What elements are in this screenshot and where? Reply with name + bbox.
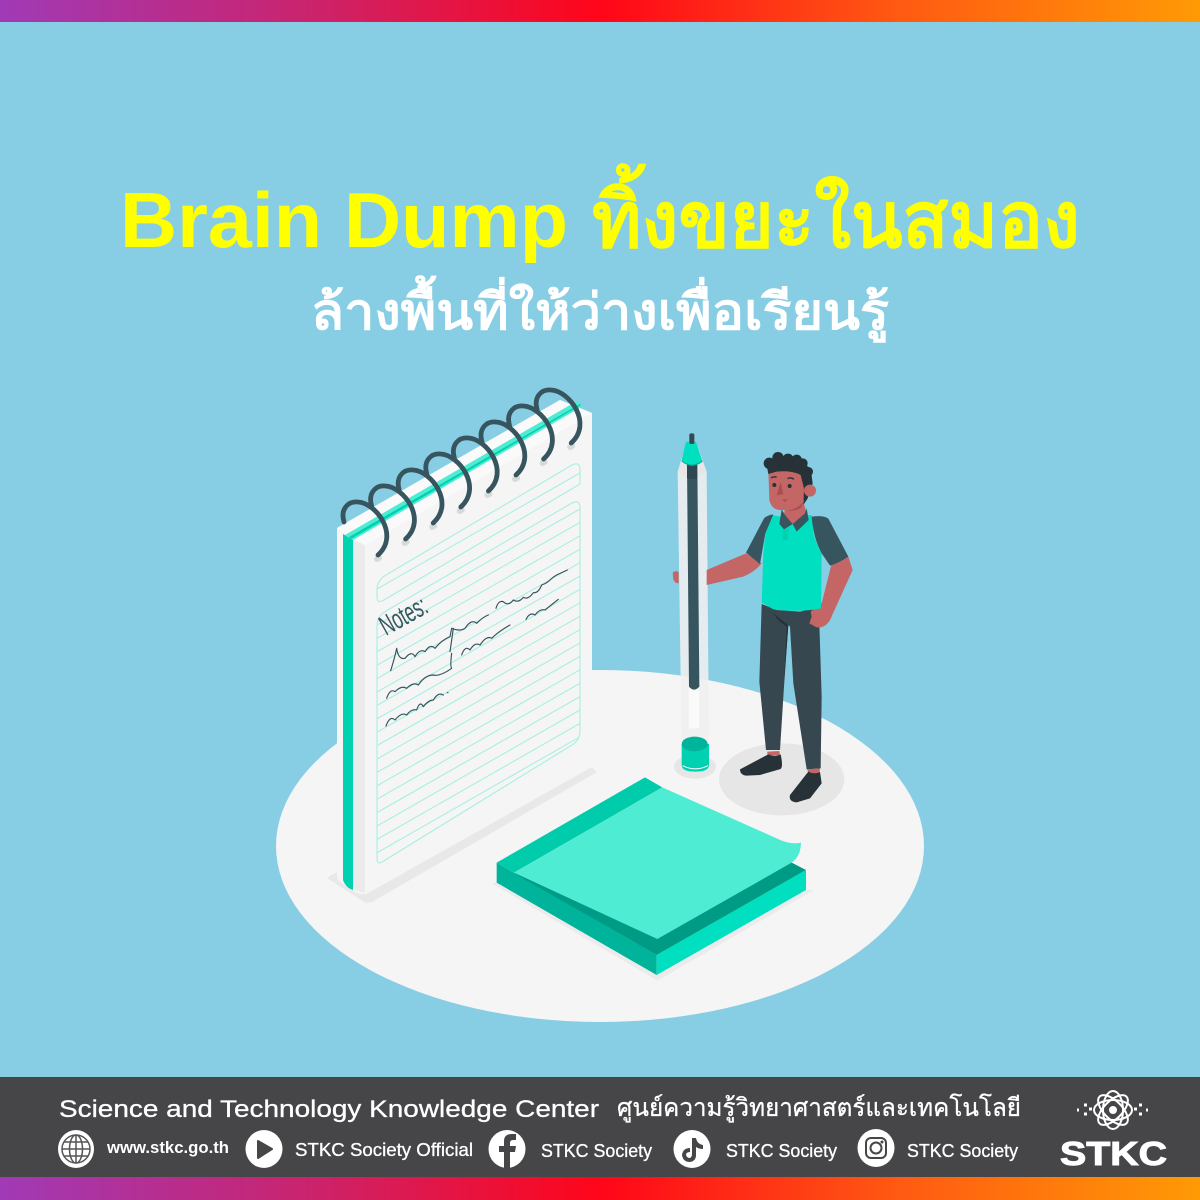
shirt placket [783, 528, 788, 541]
pencil nib [689, 433, 694, 444]
ring shadows [377, 446, 572, 559]
pencil cone [678, 442, 707, 477]
pencil barrel highlight [689, 688, 699, 728]
facebook label: STKC Society [541, 1141, 652, 1161]
icon: facebook [488, 1130, 526, 1168]
ruled box: lines [377, 502, 580, 863]
notebook top face [337, 400, 592, 545]
title: Brain Dump [120, 176, 568, 264]
right sleeve [812, 516, 848, 566]
illustration: man [673, 452, 853, 815]
icon: play [246, 1130, 282, 1168]
youtube label: STKC Society Official [295, 1140, 473, 1160]
footer band [0, 1077, 1200, 1177]
pencil bottom cap [682, 744, 709, 772]
neck [784, 500, 807, 525]
title [120, 163, 1080, 264]
pad top sheet with curl [514, 787, 801, 939]
pad binding strip [497, 777, 662, 873]
pencil tip [682, 442, 702, 465]
handwriting: scribbles [386, 570, 567, 726]
hair [764, 452, 813, 505]
pad left side [497, 863, 657, 975]
left arm [707, 553, 762, 585]
illustration: pencil [674, 433, 716, 779]
notebook green cover edge [343, 534, 353, 890]
illustration: floor disc [276, 670, 924, 1022]
trousers fold [773, 613, 788, 683]
ear [804, 485, 816, 497]
brows [771, 477, 794, 479]
nose [777, 482, 783, 495]
icon: instagram [858, 1129, 894, 1167]
left sleeve [746, 514, 773, 564]
pad right side [657, 870, 806, 975]
pencil ink shade [687, 465, 697, 479]
vest [762, 515, 822, 611]
hand on pencil [673, 571, 679, 583]
logo: STKC atom mark [1077, 1090, 1148, 1130]
footer title: english: Science and Technology Knowledge Center [59, 1096, 599, 1123]
spiral rings [343, 390, 580, 559]
icon: tiktok [674, 1130, 710, 1168]
right arm [809, 557, 853, 627]
instagram label: STKC Society [907, 1141, 1018, 1161]
notebook shadow [327, 766, 597, 903]
logo: STKC wordmark: STKC [1060, 1135, 1167, 1172]
notebook spine [353, 540, 365, 893]
collar: right piece [793, 508, 809, 532]
pencil ink tube [687, 463, 699, 690]
eyes [772, 483, 776, 487]
illustration: notebook [327, 390, 597, 903]
socks [767, 751, 820, 774]
trousers [759, 604, 822, 769]
title: ทิ้งขยะในสมอง [592, 163, 1080, 264]
shoes [740, 754, 782, 776]
notebook body [337, 400, 592, 894]
ruled box: header [377, 464, 580, 601]
handwriting: notes label: Notes: [374, 590, 433, 641]
pencil barrel [678, 472, 709, 750]
icon: globe [58, 1130, 94, 1168]
pad top under sheet [514, 863, 806, 955]
rings [343, 390, 580, 555]
head [768, 465, 807, 510]
tiktok label: STKC Society [726, 1141, 837, 1161]
subtitle: ล้างพื้นที่ให้ว่างเพื่อเรียนรู้ [311, 275, 889, 343]
top gradient bar [0, 0, 1200, 22]
bottom gradient bar [0, 1177, 1200, 1200]
man shadow [719, 743, 844, 815]
notebook green page edge [345, 401, 583, 540]
collar: left piece [779, 509, 793, 529]
website label: www.stkc.go.th [106, 1139, 229, 1157]
mouth [782, 499, 787, 502]
hand over trousers [809, 603, 832, 627]
jaw shadow [787, 503, 803, 511]
footer title: thai: ศูนย์ความรู้วิทยาศาสตร์และเทคโนโลยี [617, 1093, 1021, 1123]
pad shadow [492, 883, 814, 981]
pencil base shadow [674, 755, 716, 779]
illustration: sticky note pad [492, 777, 814, 981]
